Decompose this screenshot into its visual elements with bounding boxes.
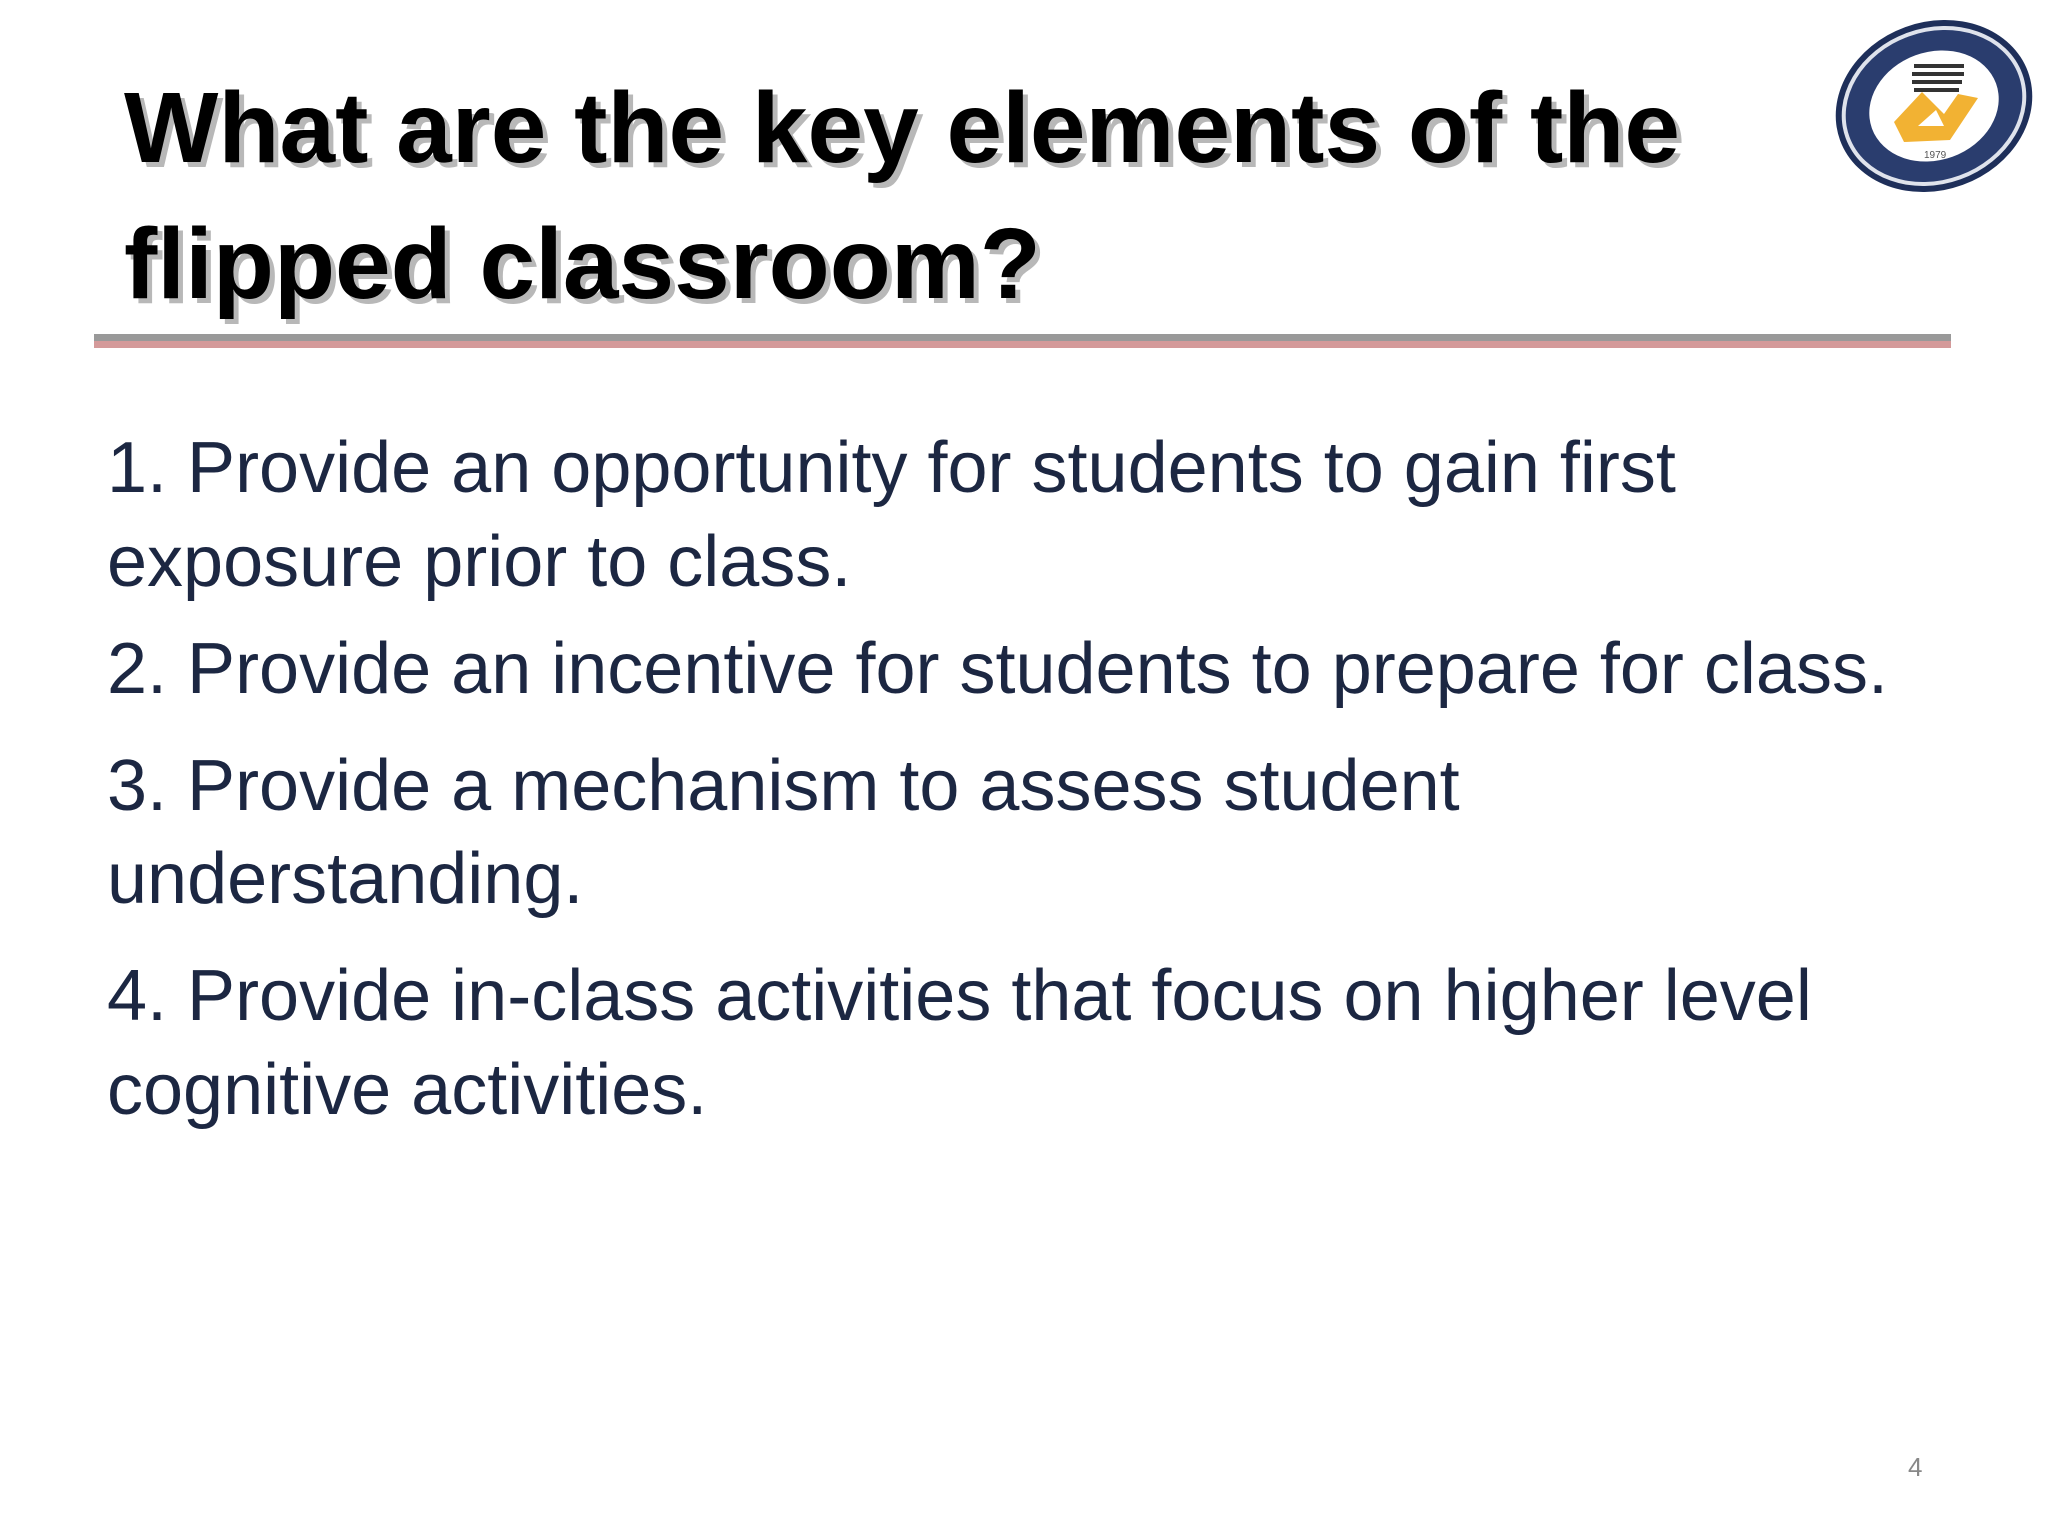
item 4 bbox=[107, 956, 1812, 1130]
item 4: cognitive activities. bbox=[107, 1050, 707, 1130]
page number: 4 bbox=[1908, 1452, 1922, 1482]
item 2: 2. Provide an incentive for students to prepare for class. bbox=[107, 629, 1888, 709]
item 4: 4. Provide in-class activities that focus on higher level bbox=[107, 956, 1812, 1036]
title: What are the key elements of the bbox=[124, 72, 1680, 184]
item 3: understanding. bbox=[107, 839, 583, 919]
logo: 1979 bbox=[1924, 150, 1947, 161]
item 1: exposure prior to class. bbox=[107, 522, 851, 602]
title underline bbox=[94, 334, 1951, 348]
item 1: 1. Provide an opportunity for students to gain first bbox=[107, 428, 1676, 508]
title bbox=[124, 72, 1682, 324]
item 3 bbox=[107, 746, 1460, 919]
item 1 bbox=[107, 428, 1676, 602]
logo bbox=[1836, 20, 2032, 192]
title: flipped classroom? bbox=[124, 208, 1041, 320]
item 3: 3. Provide a mechanism to assess student bbox=[107, 746, 1460, 826]
